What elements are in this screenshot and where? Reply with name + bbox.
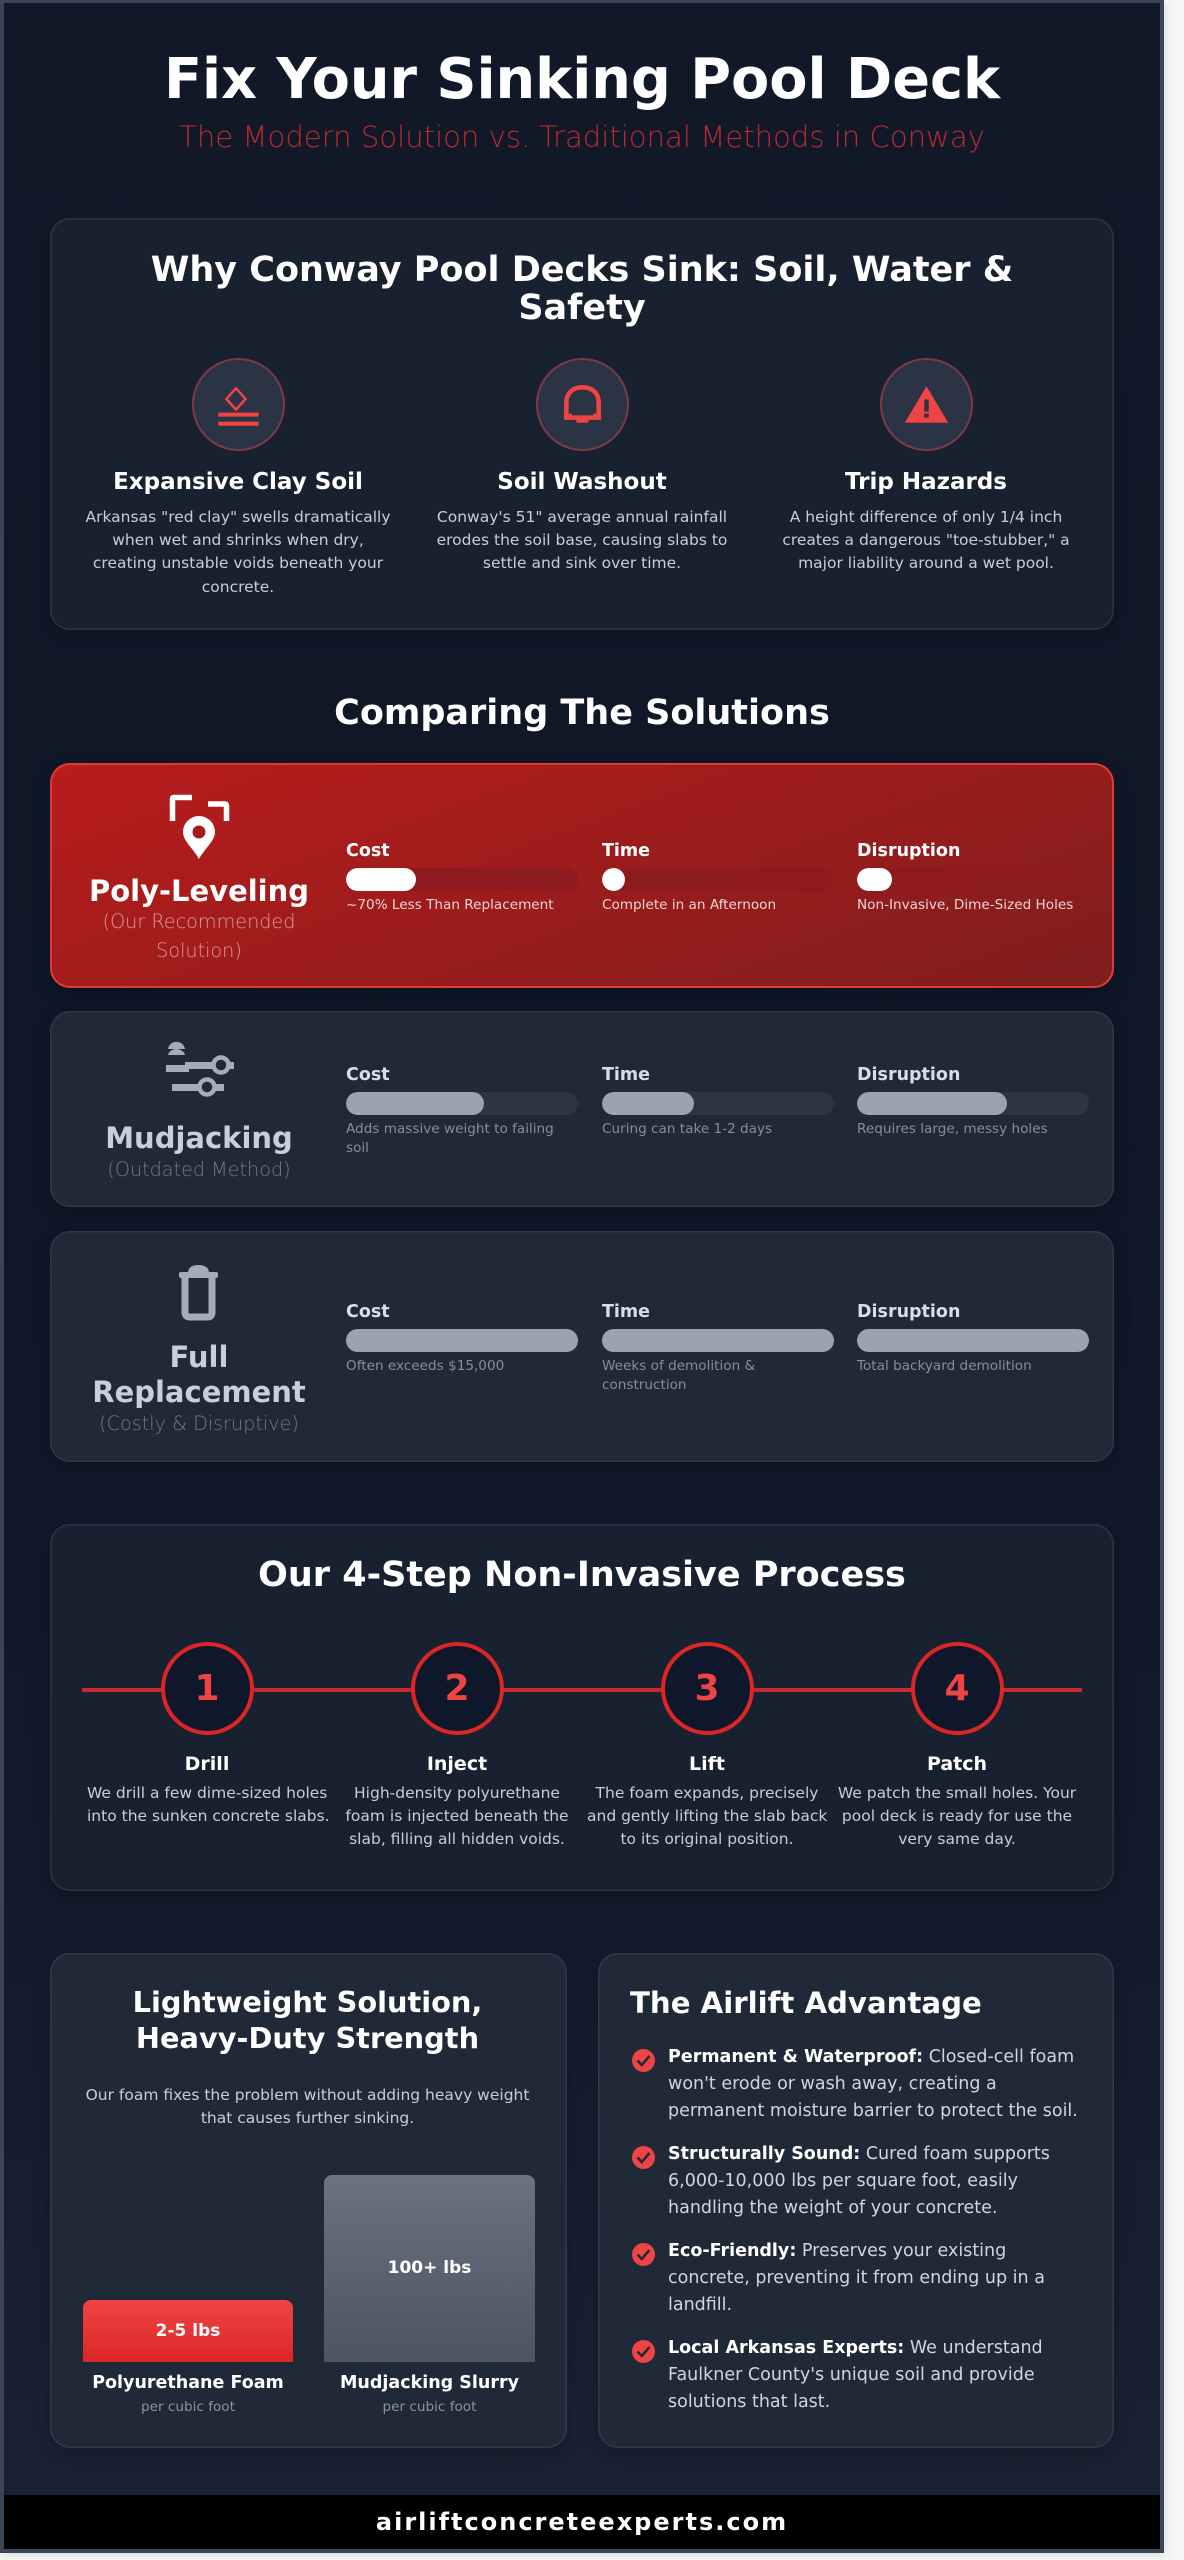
metric: cost: Often exceeds $15,000 [346, 1358, 504, 1374]
benefit text [668, 2238, 1045, 2319]
metric: disruption: Total backyard demolition [857, 1358, 1032, 1374]
cause: trip hazards: Trip Hazards [845, 469, 1007, 495]
bar: mudjacking slurry [324, 2175, 535, 2362]
benefit text: 6,000-10,000 lbs per square foot, easily [668, 2171, 1018, 2191]
icon: check [632, 2340, 655, 2363]
metric: disruption: Non-Invasive, Dime-Sized Holes [857, 897, 1073, 913]
icon: target pin [170, 794, 230, 859]
metric: disruption [857, 1065, 1089, 1137]
benefit: permanent and waterproof [632, 2047, 1078, 2121]
benefit text [668, 2047, 1078, 2121]
benefit text: Local Arkansas Experts: We understand [668, 2338, 1043, 2358]
step number [410, 1642, 504, 1735]
metric: disruption: Disruption [857, 1065, 960, 1085]
metric: time: Time [602, 1065, 650, 1085]
panel: mudjacking [50, 1011, 1114, 1207]
footer bar: airliftconcreteexperts.com [376, 2508, 788, 2536]
step description: and gently lifting the slab back [587, 1807, 827, 1825]
option tagline: (Our Recommended [103, 910, 295, 933]
benefit text: Faulkner County's unique soil and provide [668, 2365, 1035, 2385]
step number [660, 1642, 754, 1735]
step 4 [838, 1642, 1076, 1848]
step title: Drill [185, 1753, 229, 1775]
metric: cost: ~70% Less Than Replacement [346, 897, 554, 913]
icon: soil washout [536, 358, 629, 451]
heading [151, 250, 1013, 328]
cause: soil washout: Soil Washout [497, 469, 667, 495]
metric: time: Time [602, 1302, 650, 1322]
step number [910, 1642, 1004, 1735]
metric: time: Time [602, 841, 650, 861]
text: washout description: erodes the soil base, causing slabs to [437, 531, 727, 549]
benefit text: permanent moisture barrier to protect the soil. [668, 2101, 1078, 2121]
icon: trash can [179, 1265, 218, 1320]
step 3 [587, 1642, 828, 1848]
heading: Our 4-Step Non-Invasive Process [258, 1555, 906, 1595]
bar: polyurethane foam: 2-5 lbs [156, 2321, 220, 2341]
bar unit: mudjacking slurry: per cubic foot [383, 2399, 476, 2415]
metric: time [602, 1065, 834, 1137]
metric: time: Weeks of demolition & [602, 1358, 755, 1374]
metric: time [602, 841, 804, 913]
bar chart [83, 2175, 535, 2415]
heading: comparing the solutions: Comparing The Solutions [334, 693, 830, 733]
metric: time: Curing can take 1-2 days [602, 1121, 772, 1137]
option tagline: (Costly & Disruptive) [99, 1412, 299, 1435]
metric: disruption: Disruption [857, 1302, 960, 1322]
step description [345, 1784, 569, 1848]
text: washout description: Conway's 51" average annual rainfall [437, 508, 727, 526]
benefit text: landfill. [668, 2295, 732, 2315]
step 2 [345, 1642, 569, 1848]
panel: why pool decks sink [50, 218, 1114, 630]
step description: very same day. [898, 1830, 1016, 1848]
option name: Full [170, 1340, 228, 1374]
benefit text: Permanent & Waterproof: Closed-cell foam [668, 2047, 1074, 2067]
heading: Heavy-Duty Strength [136, 2020, 479, 2054]
metric: cost: soil [346, 1140, 369, 1156]
benefit: local experts [632, 2335, 1092, 2416]
intro text: that causes further sinking. [201, 2109, 414, 2127]
step title: Inject [427, 1753, 487, 1775]
heading: The Airlift Advantage [630, 1986, 982, 2020]
text: trip hazard description: creates a dangerous "toe-stubber," a [782, 531, 1070, 549]
icon: check [632, 2049, 655, 2072]
step number: 1 [194, 1668, 220, 1709]
metric: cost: Cost [346, 1302, 390, 1322]
metric: cost [346, 1302, 578, 1374]
bar unit: polyurethane foam: per cubic foot [141, 2399, 235, 2415]
icon: trip hazard [880, 358, 973, 451]
cause: expansive clay soil: Expansive Clay Soil [113, 469, 363, 495]
step title: Lift [689, 1753, 725, 1775]
benefit text: Eco-Friendly: Preserves your existing [668, 2241, 1006, 2261]
panel: poly-leveling [50, 763, 1114, 988]
metric: cost [346, 841, 578, 913]
step description: High-density polyurethane [354, 1784, 560, 1802]
step 1 [87, 1642, 330, 1825]
heading: Why Conway Pool Decks Sink: Soil, Water & [151, 250, 1013, 290]
text: clay soil description: Arkansas "red clay" swells dramatically [86, 508, 390, 526]
step title: Patch [927, 1753, 987, 1775]
step description: slab, filling all hidden voids. [349, 1830, 565, 1848]
text: clay soil description: concrete. [202, 578, 274, 596]
step number [160, 1642, 254, 1735]
icon: check [632, 2146, 655, 2169]
metric: time: construction [602, 1377, 687, 1393]
icon: sliders [166, 1042, 234, 1097]
heading: Safety [518, 288, 646, 328]
step description [838, 1784, 1076, 1848]
text: washout description: settle and sink over time. [483, 554, 681, 572]
icon: clay soil [192, 358, 285, 451]
panel: airlift advantage [598, 1953, 1114, 2448]
text: clay soil description [86, 508, 390, 596]
option name: Poly-Leveling [89, 874, 309, 908]
step number: 3 [694, 1668, 720, 1709]
step description: foam is injected beneath the [345, 1807, 569, 1825]
panel: full replacement [50, 1231, 1114, 1462]
timeline line [82, 1688, 1082, 1692]
text: trip hazard description: A height difference of only 1/4 inch [790, 508, 1062, 526]
benefit: eco-friendly [632, 2241, 1045, 2315]
benefit text: handling the weight of your concrete. [668, 2198, 998, 2218]
benefit: structurally sound [632, 2144, 1050, 2218]
step description [87, 1784, 330, 1825]
option tagline: (Outdated Method) [107, 1158, 291, 1181]
footer bar [4, 2495, 1160, 2549]
metric: time: Complete in an Afternoon [602, 897, 776, 913]
metric: cost: Cost [346, 841, 390, 861]
step description [587, 1784, 828, 1848]
step description: to its original position. [620, 1830, 794, 1848]
step description: We drill a few dime-sized holes [87, 1784, 327, 1802]
metric: cost: Adds massive weight to failing [346, 1121, 554, 1137]
heading [133, 1985, 482, 2054]
benefit text: concrete, preventing it from ending up in a [668, 2268, 1045, 2288]
text: washout description [437, 508, 727, 572]
option name: Mudjacking [105, 1121, 293, 1155]
benefit text: solutions that last. [668, 2392, 830, 2412]
bar label: polyurethane foam: Polyurethane Foam [92, 2373, 284, 2393]
icon: check [632, 2243, 655, 2266]
metric: disruption [857, 841, 1073, 913]
panel: weight comparison [50, 1953, 567, 2448]
step number: 4 [944, 1668, 970, 1709]
step description: into the sunken concrete slabs. [87, 1807, 330, 1825]
bar label: mudjacking slurry: Mudjacking Slurry [340, 2373, 519, 2393]
benefit text [668, 2335, 1043, 2416]
metric: disruption [856, 1302, 1089, 1374]
intro text [86, 2086, 530, 2127]
bar: polyurethane foam [83, 2300, 293, 2362]
benefit text [668, 2144, 1050, 2218]
metric: cost: Cost [346, 1065, 390, 1085]
step description: The foam expands, precisely [596, 1784, 818, 1802]
metric: cost [346, 1065, 578, 1156]
option name [92, 1340, 306, 1409]
step description: pool deck is ready for use the [842, 1807, 1072, 1825]
metric: disruption: Disruption [857, 841, 960, 861]
text: clay soil description: when wet and shrinks when dry, [112, 531, 364, 549]
title: Fix Your Sinking Pool Deck [164, 47, 1000, 112]
subtitle: The Modern Solution vs. Traditional Methods in Conway [179, 120, 985, 154]
option tagline [103, 910, 295, 962]
step description: We patch the small holes. Your [838, 1784, 1076, 1802]
option tagline: Solution) [156, 938, 242, 962]
benefit text: won't erode or wash away, creating a [668, 2074, 997, 2094]
text: trip hazard description [782, 508, 1070, 572]
text: trip hazard description: major liability around a wet pool. [798, 554, 1054, 572]
step number: 2 [444, 1668, 470, 1709]
option name: Replacement [92, 1375, 306, 1409]
metric: time [602, 1302, 834, 1393]
intro text: Our foam fixes the problem without adding heavy weight [86, 2086, 529, 2104]
metric: disruption: Requires large, messy holes [857, 1121, 1048, 1137]
heading: Lightweight Solution, [133, 1985, 482, 2019]
benefit text: Structurally Sound: Cured foam supports [668, 2144, 1050, 2164]
panel: 4-step process [50, 1524, 1114, 1891]
text: clay soil description: creating unstable voids beneath your [93, 554, 383, 572]
bar: mudjacking slurry: 100+ lbs [388, 2258, 471, 2278]
